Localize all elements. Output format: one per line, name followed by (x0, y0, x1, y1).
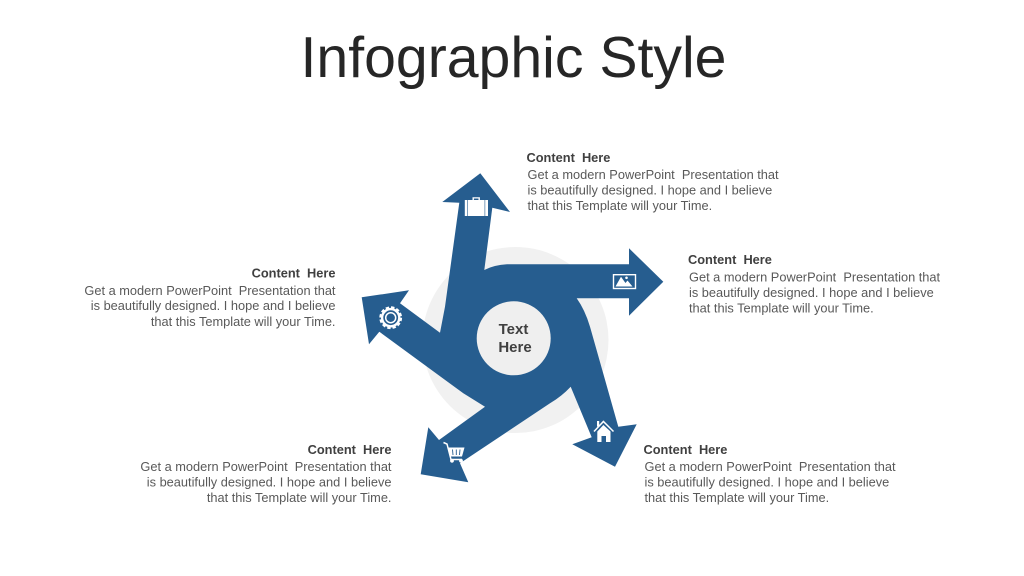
text block: bottom right: Content Here (644, 442, 727, 457)
background circle (422, 247, 608, 433)
text block: top: Content Here (526, 150, 610, 165)
icon: house (594, 421, 614, 442)
text block: left: Content Here (252, 266, 336, 280)
text block: right: that this Template will your Time. (689, 300, 874, 316)
icon: shopping cart (444, 442, 464, 463)
text block: left: is beautifully designed. I hope and I believe (91, 298, 336, 313)
text block: right (688, 252, 941, 316)
center circle: Text (499, 321, 528, 338)
text block: top: Get a modern PowerPoint Presentation that (528, 167, 779, 182)
text block: top: is beautifully designed. I hope and I believe (528, 182, 772, 198)
center circle (477, 301, 551, 375)
text block: right: is beautifully designed. I hope and I believe (689, 285, 934, 300)
text block: bottom left: that this Template will your Time. (207, 490, 392, 505)
title: Infographic Style (301, 26, 726, 90)
text block: bottom right (644, 442, 896, 505)
text block: left (84, 266, 336, 329)
text block: left: Get a modern PowerPoint Presentation that (84, 283, 336, 298)
text block: right: Get a modern PowerPoint Presentation that (689, 270, 941, 284)
text block: bottom left: is beautifully designed. I hope and I believe (147, 474, 392, 490)
text block: left: that this Template will your Time. (151, 314, 336, 329)
text block: bottom right: Get a modern PowerPoint Presentation that (644, 459, 896, 474)
text block: right: Content Here (688, 252, 772, 267)
text block: bottom right: that this Template will your Time. (644, 490, 829, 505)
text block: bottom right: is beautifully designed. I hope and I believe (644, 474, 889, 490)
five-arrow star (362, 173, 663, 482)
icon: picture (614, 275, 636, 288)
icon: briefcase (465, 197, 488, 216)
text block: top: that this Template will your Time. (528, 198, 712, 213)
icon: gear (380, 307, 401, 328)
text block: bottom left: Content Here (308, 442, 392, 457)
text block: top (526, 150, 779, 213)
text block: bottom left: Get a modern PowerPoint Presentation that (140, 459, 392, 474)
center circle: Here (498, 339, 532, 356)
text block: bottom left (140, 442, 392, 505)
